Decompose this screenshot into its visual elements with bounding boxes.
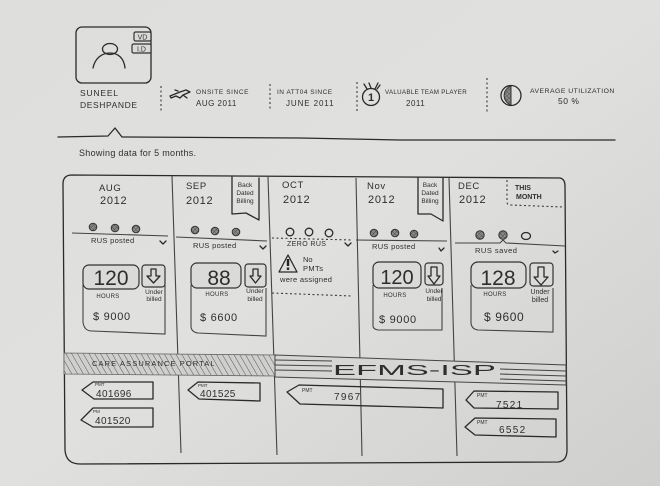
card: hours and amount: $ 9000 bbox=[93, 311, 131, 323]
column: December 2012 bbox=[455, 180, 565, 332]
stat: average utilization: AVERAGE UTILIZATION bbox=[530, 88, 615, 95]
PMT tag: 401696: PMT bbox=[95, 382, 105, 387]
card: hours and amount: HOURS bbox=[205, 292, 229, 298]
icon: person avatar bbox=[93, 44, 125, 68]
PMT tag: 7521 bbox=[466, 391, 558, 411]
card: hours and amount bbox=[191, 263, 266, 336]
project band: care assurance portal: CARE ASSURANCE PORTAL bbox=[92, 359, 216, 368]
callout: no PMTs assigned bbox=[279, 255, 332, 284]
badge: VD: VD bbox=[138, 34, 147, 42]
callout: no PMTs assigned: were assigned bbox=[279, 275, 332, 284]
column: November 2012: Nov bbox=[367, 181, 386, 192]
ribbon: back dated billing: Dated bbox=[236, 190, 254, 197]
stat: in company since: JUNE 2011 bbox=[286, 99, 334, 108]
badge: I.D: I.D bbox=[137, 46, 146, 54]
employee name bbox=[80, 88, 138, 110]
icon: half filled pie bbox=[501, 86, 521, 106]
card: hours and amount: $ 9600 bbox=[484, 310, 524, 324]
PMT tag: 7521: 7521 bbox=[496, 400, 523, 411]
column: December 2012: 2012 bbox=[459, 194, 486, 206]
PMT tag: 401525: PMT bbox=[198, 383, 208, 388]
icon: airplane bbox=[170, 90, 190, 98]
profile card bbox=[76, 27, 151, 83]
main timeline panel bbox=[63, 175, 567, 464]
tag: this month bbox=[507, 180, 563, 207]
card: hours and amount: $ 6600 bbox=[200, 312, 238, 324]
project band: EFMS-ISP bbox=[275, 355, 566, 385]
column: September 2012 bbox=[176, 177, 267, 336]
ribbon: back dated billing: Billing bbox=[236, 198, 254, 205]
card: hours and amount: Under bbox=[425, 288, 443, 295]
card: hours and amount: HOURS bbox=[383, 293, 407, 299]
card: hours and amount: $ 9000 bbox=[379, 314, 417, 326]
project band: care assurance portal bbox=[64, 353, 275, 376]
card: hours and amount: Under bbox=[145, 289, 164, 296]
ribbon: back dated billing bbox=[418, 178, 443, 221]
PMT tag: 6552: PMT bbox=[477, 420, 488, 426]
PMT tag: 401520 bbox=[81, 408, 153, 427]
stat: onsite since: ONSITE SINCE bbox=[196, 89, 249, 96]
column: November 2012 bbox=[356, 178, 447, 330]
card: hours and amount: billed bbox=[427, 296, 442, 303]
column: November 2012: RUS posted bbox=[372, 242, 415, 251]
project band: EFMS-ISP: EFMS-ISP bbox=[333, 361, 496, 378]
showing data note: Showing data for 5 months. bbox=[79, 148, 196, 158]
PMT tag: 7967 bbox=[287, 385, 443, 408]
icon: number one medal: 1 bbox=[368, 92, 374, 104]
column: August 2012: RUS posted bbox=[91, 236, 134, 245]
ribbon: back dated billing: Dated bbox=[421, 190, 439, 197]
stat: onsite since bbox=[170, 89, 249, 108]
column: November 2012: 2012 bbox=[368, 194, 395, 206]
stat: onsite since: AUG 2011 bbox=[196, 99, 237, 108]
column: August 2012: AUG bbox=[99, 183, 121, 194]
stat: average utilization bbox=[501, 86, 615, 106]
stat: valuable team player: VALUABLE TEAM PLAYER bbox=[385, 89, 467, 96]
column: September 2012: 2012 bbox=[186, 195, 213, 207]
card: hours and amount: HOURS bbox=[96, 294, 120, 300]
PMT tag: 401525 bbox=[188, 382, 260, 401]
callout: no PMTs assigned: No bbox=[303, 255, 313, 264]
ribbon: back dated billing: Back bbox=[238, 182, 253, 189]
PMT tag: 7967: PMT bbox=[302, 388, 313, 394]
employee name: DESHPANDE bbox=[80, 100, 138, 110]
column: September 2012: SEP bbox=[186, 181, 207, 192]
column: October 2012: 2012 bbox=[283, 194, 310, 206]
stat: average utilization: 50 % bbox=[558, 96, 579, 106]
stat: valuable team player: 2011 bbox=[406, 99, 425, 108]
card: hours and amount: 128 bbox=[480, 267, 516, 290]
ribbon: back dated billing: Back bbox=[423, 182, 438, 189]
ribbon: back dated billing bbox=[232, 177, 259, 220]
PMT tag: 401520: PM bbox=[93, 409, 100, 414]
card: hours and amount bbox=[83, 265, 165, 334]
card: hours and amount: HOURS bbox=[483, 292, 507, 298]
PMT tag: 401696: 401696 bbox=[96, 389, 132, 400]
card: hours and amount: 88 bbox=[207, 267, 231, 290]
column: September 2012: RUS posted bbox=[193, 241, 236, 250]
card: hours and amount: 120 bbox=[380, 267, 414, 289]
column: December 2012: DEC bbox=[458, 181, 480, 192]
card: hours and amount bbox=[471, 262, 553, 332]
column: August 2012 bbox=[72, 183, 168, 334]
ribbon: back dated billing: Billing bbox=[421, 198, 439, 205]
card: hours and amount: billed bbox=[532, 297, 548, 304]
card: hours and amount bbox=[373, 262, 443, 330]
PMT tag: 401525: 401525 bbox=[200, 389, 236, 400]
card: hours and amount: 120 bbox=[93, 267, 129, 290]
PMT tag: 401696 bbox=[82, 382, 153, 400]
timeline pointer rule bbox=[58, 128, 615, 140]
PMT tag: 6552: 6552 bbox=[499, 425, 526, 436]
tag: this month: THIS bbox=[515, 185, 531, 192]
PMT tag: 401520: 401520 bbox=[95, 416, 131, 427]
card: hours and amount: billed bbox=[146, 296, 162, 303]
PMT tag: 7967: 7967 bbox=[334, 392, 361, 403]
stat: in company since bbox=[277, 89, 334, 108]
PMT tag: 7521: PMT bbox=[477, 393, 488, 399]
column: October 2012: OCT bbox=[282, 180, 304, 191]
card: hours and amount: Under bbox=[530, 289, 550, 296]
column: August 2012: 2012 bbox=[100, 195, 127, 207]
PMT tag: 6552 bbox=[465, 418, 556, 437]
tag: this month: MONTH bbox=[516, 194, 542, 201]
column: October 2012: ZERO RUS bbox=[287, 241, 326, 248]
card: hours and amount: Under bbox=[246, 288, 265, 295]
employee name: SUNEEL bbox=[80, 88, 119, 98]
column: October 2012 bbox=[272, 180, 352, 296]
stat: valuable team player bbox=[362, 83, 467, 108]
callout: no PMTs assigned: PMTs bbox=[303, 264, 323, 273]
stat: in company since: IN ATT04 SINCE bbox=[277, 89, 333, 96]
card: hours and amount: billed bbox=[247, 296, 263, 303]
column: December 2012: RUS saved bbox=[475, 246, 517, 255]
